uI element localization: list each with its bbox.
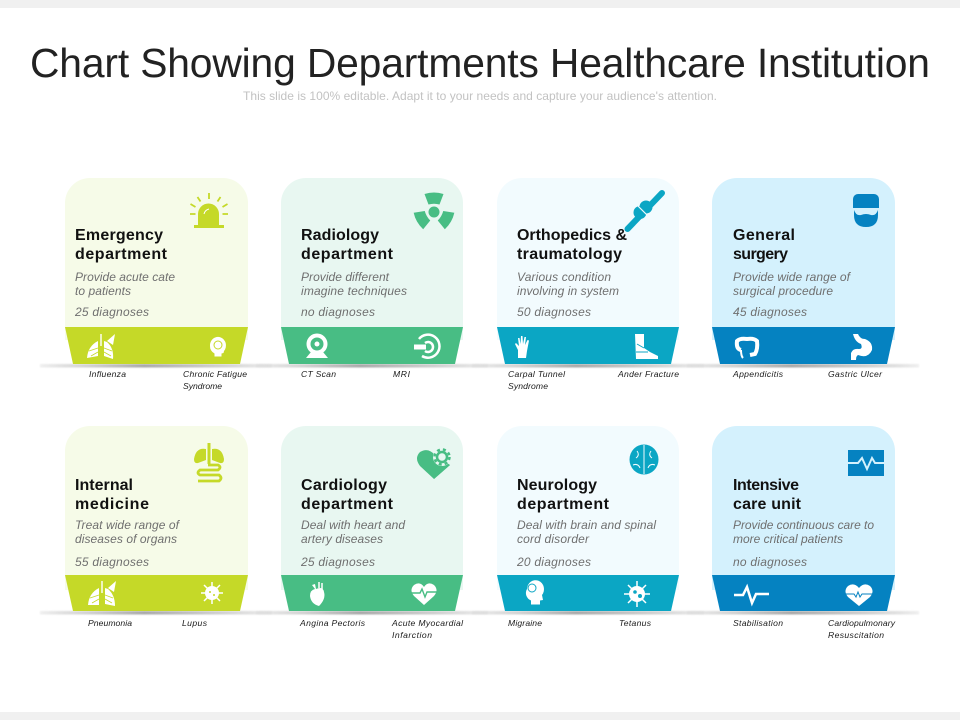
label: cardiopulmonary resuscitation: Resuscitation — [828, 630, 884, 640]
label: pneumonia: Pneumonia — [88, 618, 132, 628]
panel: orthopedics and traumatology — [472, 178, 704, 391]
icon: bone joint — [628, 193, 662, 229]
heading: Intensive — [733, 477, 799, 494]
icon: ct scanner — [306, 336, 328, 358]
description: Provide acute cate — [75, 270, 175, 284]
label: carpal tunnel syndrome: Carpal Tunnel — [508, 369, 566, 379]
label: gastric ulcer: Gastric Ulcer — [828, 369, 883, 379]
panel: general surgery — [687, 178, 919, 379]
diagnoses count: 20 diagnoses — [516, 555, 591, 569]
diagnoses count: 55 diagnoses — [75, 555, 149, 569]
title: Chart Showing Departments Healthcare Institution — [30, 40, 930, 86]
heading: Emergency — [75, 227, 163, 244]
heading: department — [517, 496, 610, 513]
panel: emergency department — [40, 178, 272, 391]
label: acute myocardial infarction: Infarction — [392, 630, 432, 640]
heading: surgery — [733, 246, 788, 263]
description: Deal with heart and — [301, 518, 405, 532]
icon: surgeon mask — [853, 194, 879, 227]
description: to patients — [75, 284, 131, 298]
icon: lungs — [88, 581, 116, 606]
label: appendicitis: Appendicitis — [732, 369, 784, 379]
diagnoses count: no diagnoses — [301, 305, 375, 319]
description: Deal with brain and spinal — [517, 518, 656, 532]
label: stabilisation: Stabilisation — [733, 618, 783, 628]
icon: heart with pulse — [411, 583, 437, 605]
label: acute myocardial infarction: Acute Myocardial — [391, 618, 464, 628]
icon: heart with cog — [417, 448, 451, 479]
icon: head with brain — [526, 580, 544, 604]
description: cord disorder — [517, 532, 590, 546]
label: cardiopulmonary resuscitation: Cardiopulmonary — [828, 618, 896, 628]
diagnoses count: 25 diagnoses — [300, 555, 375, 569]
icon: bandaged foot — [635, 334, 658, 359]
panel: intensive care unit — [687, 426, 919, 640]
description: Various condition — [517, 270, 611, 284]
panel: neurology department — [472, 426, 704, 628]
heading: Orthopedics & — [517, 227, 627, 244]
panel: internal medicine — [40, 426, 272, 628]
diagnoses count: 45 diagnoses — [733, 305, 807, 319]
description: involving in system — [517, 284, 619, 298]
heading: Internal — [75, 477, 133, 494]
icon: monitor pulse — [848, 450, 884, 476]
description: Provide wide range of — [733, 270, 852, 284]
heading: Neurology — [517, 477, 597, 494]
heading: department — [301, 496, 394, 513]
label: influenza: Influenza — [89, 369, 126, 379]
icon: head with brain — [210, 337, 226, 356]
panel: cardiology department — [256, 426, 488, 640]
label: chronic fatigue syndrome: Chronic Fatigue — [183, 369, 247, 379]
icon: alarm light — [190, 193, 228, 228]
description: artery diseases — [301, 532, 383, 546]
diagnoses count: 50 diagnoses — [517, 305, 591, 319]
label: chronic fatigue syndrome: Syndrome — [183, 381, 222, 391]
description: Treat wide range of — [75, 518, 181, 532]
diagnoses count: no diagnoses — [733, 555, 807, 569]
icon: stomach — [851, 334, 872, 360]
icon: pulse line — [734, 587, 769, 603]
icon: lungs — [87, 334, 115, 359]
description: imagine techniques — [301, 284, 407, 298]
description: Provide different — [301, 270, 390, 284]
description: surgical procedure — [733, 284, 833, 298]
icon: colon — [737, 339, 757, 358]
heading: medicine — [75, 496, 149, 513]
label: tetanus: Tetanus — [619, 618, 652, 628]
icon: heart with pulse — [846, 584, 872, 606]
heading: department — [301, 246, 394, 263]
description: diseases of organs — [75, 532, 177, 546]
icon: mri machine — [414, 335, 439, 358]
label: lupus: Lupus — [182, 618, 208, 628]
heading: General — [733, 227, 795, 244]
icon: bacterium — [624, 581, 650, 607]
icon: anatomical heart — [310, 582, 324, 606]
diagnoses count: 25 diagnoses — [74, 305, 149, 319]
heading: traumatology — [517, 246, 622, 263]
label: ander fracture: Ander Fracture — [617, 369, 679, 379]
heading: care unit — [733, 496, 802, 513]
label: migraine: Migraine — [508, 618, 542, 628]
label: ct scan: CT Scan — [301, 369, 336, 379]
icon: brain — [630, 444, 658, 474]
label: angina pectoris: Angina Pectoris — [299, 618, 366, 628]
icon: virus — [201, 582, 223, 604]
subtitle: This slide is 100% editable. Adapt it to your needs and capture your audience's attention. — [243, 89, 717, 103]
label: carpal tunnel syndrome: Syndrome — [508, 381, 548, 391]
label: mri: MRI — [393, 369, 411, 379]
heading: Cardiology — [301, 477, 387, 494]
icon: internal organs — [194, 443, 224, 481]
icon: radiation — [412, 192, 456, 230]
panel: radiology department — [256, 178, 488, 379]
description: more critical patients — [733, 532, 843, 546]
icon: hand — [515, 336, 529, 358]
heading: department — [75, 246, 168, 263]
description: Provide continuous care to — [733, 518, 874, 532]
heading: Radiology — [301, 227, 379, 244]
